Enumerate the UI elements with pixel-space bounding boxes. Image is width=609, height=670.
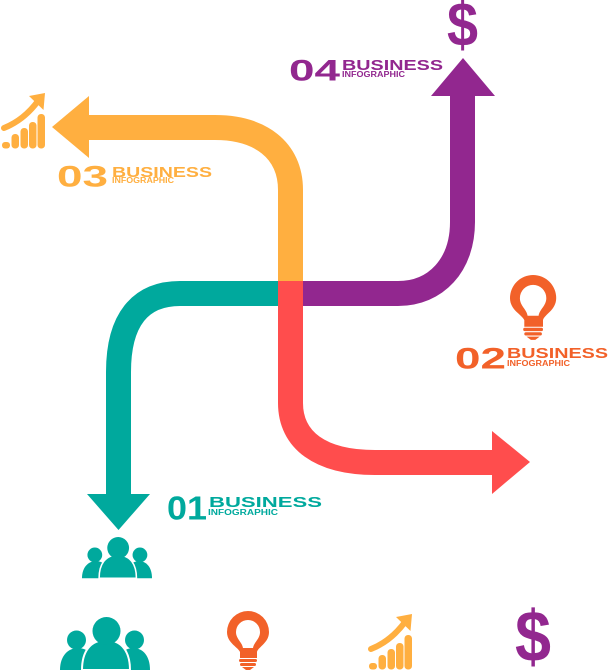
arrow 02: red pointing right [290,281,530,494]
icon: bulb small [510,275,556,340]
icon: chart small [2,93,45,148]
label 01 [167,490,322,526]
arrow 03: orange pointing left [52,96,290,281]
label 04: BUSINESS [342,57,443,74]
label 03: INFOGRAPHIC [112,176,174,185]
label 03 [57,160,212,194]
label 02 [455,342,608,376]
icon: chart large [369,614,412,670]
label 02: INFOGRAPHIC [507,359,570,368]
label 01: INFOGRAPHIC [208,508,278,517]
label 04: 04 [289,54,341,88]
icon: people small [82,537,152,578]
label 04: INFOGRAPHIC [342,70,405,79]
arrow 04: purple pointing up [303,58,495,294]
label 03: 03 [57,160,108,194]
label 02: 02 [455,342,506,376]
label 02: BUSINESS [507,345,608,362]
icon: bulb large [227,611,269,670]
label 01: BUSINESS [209,494,322,511]
label 03: BUSINESS [112,164,212,181]
label 04 [289,54,443,88]
arrow 01: teal pointing down [87,294,278,530]
label 01: 01 [167,490,207,526]
icon: people large [60,617,150,670]
